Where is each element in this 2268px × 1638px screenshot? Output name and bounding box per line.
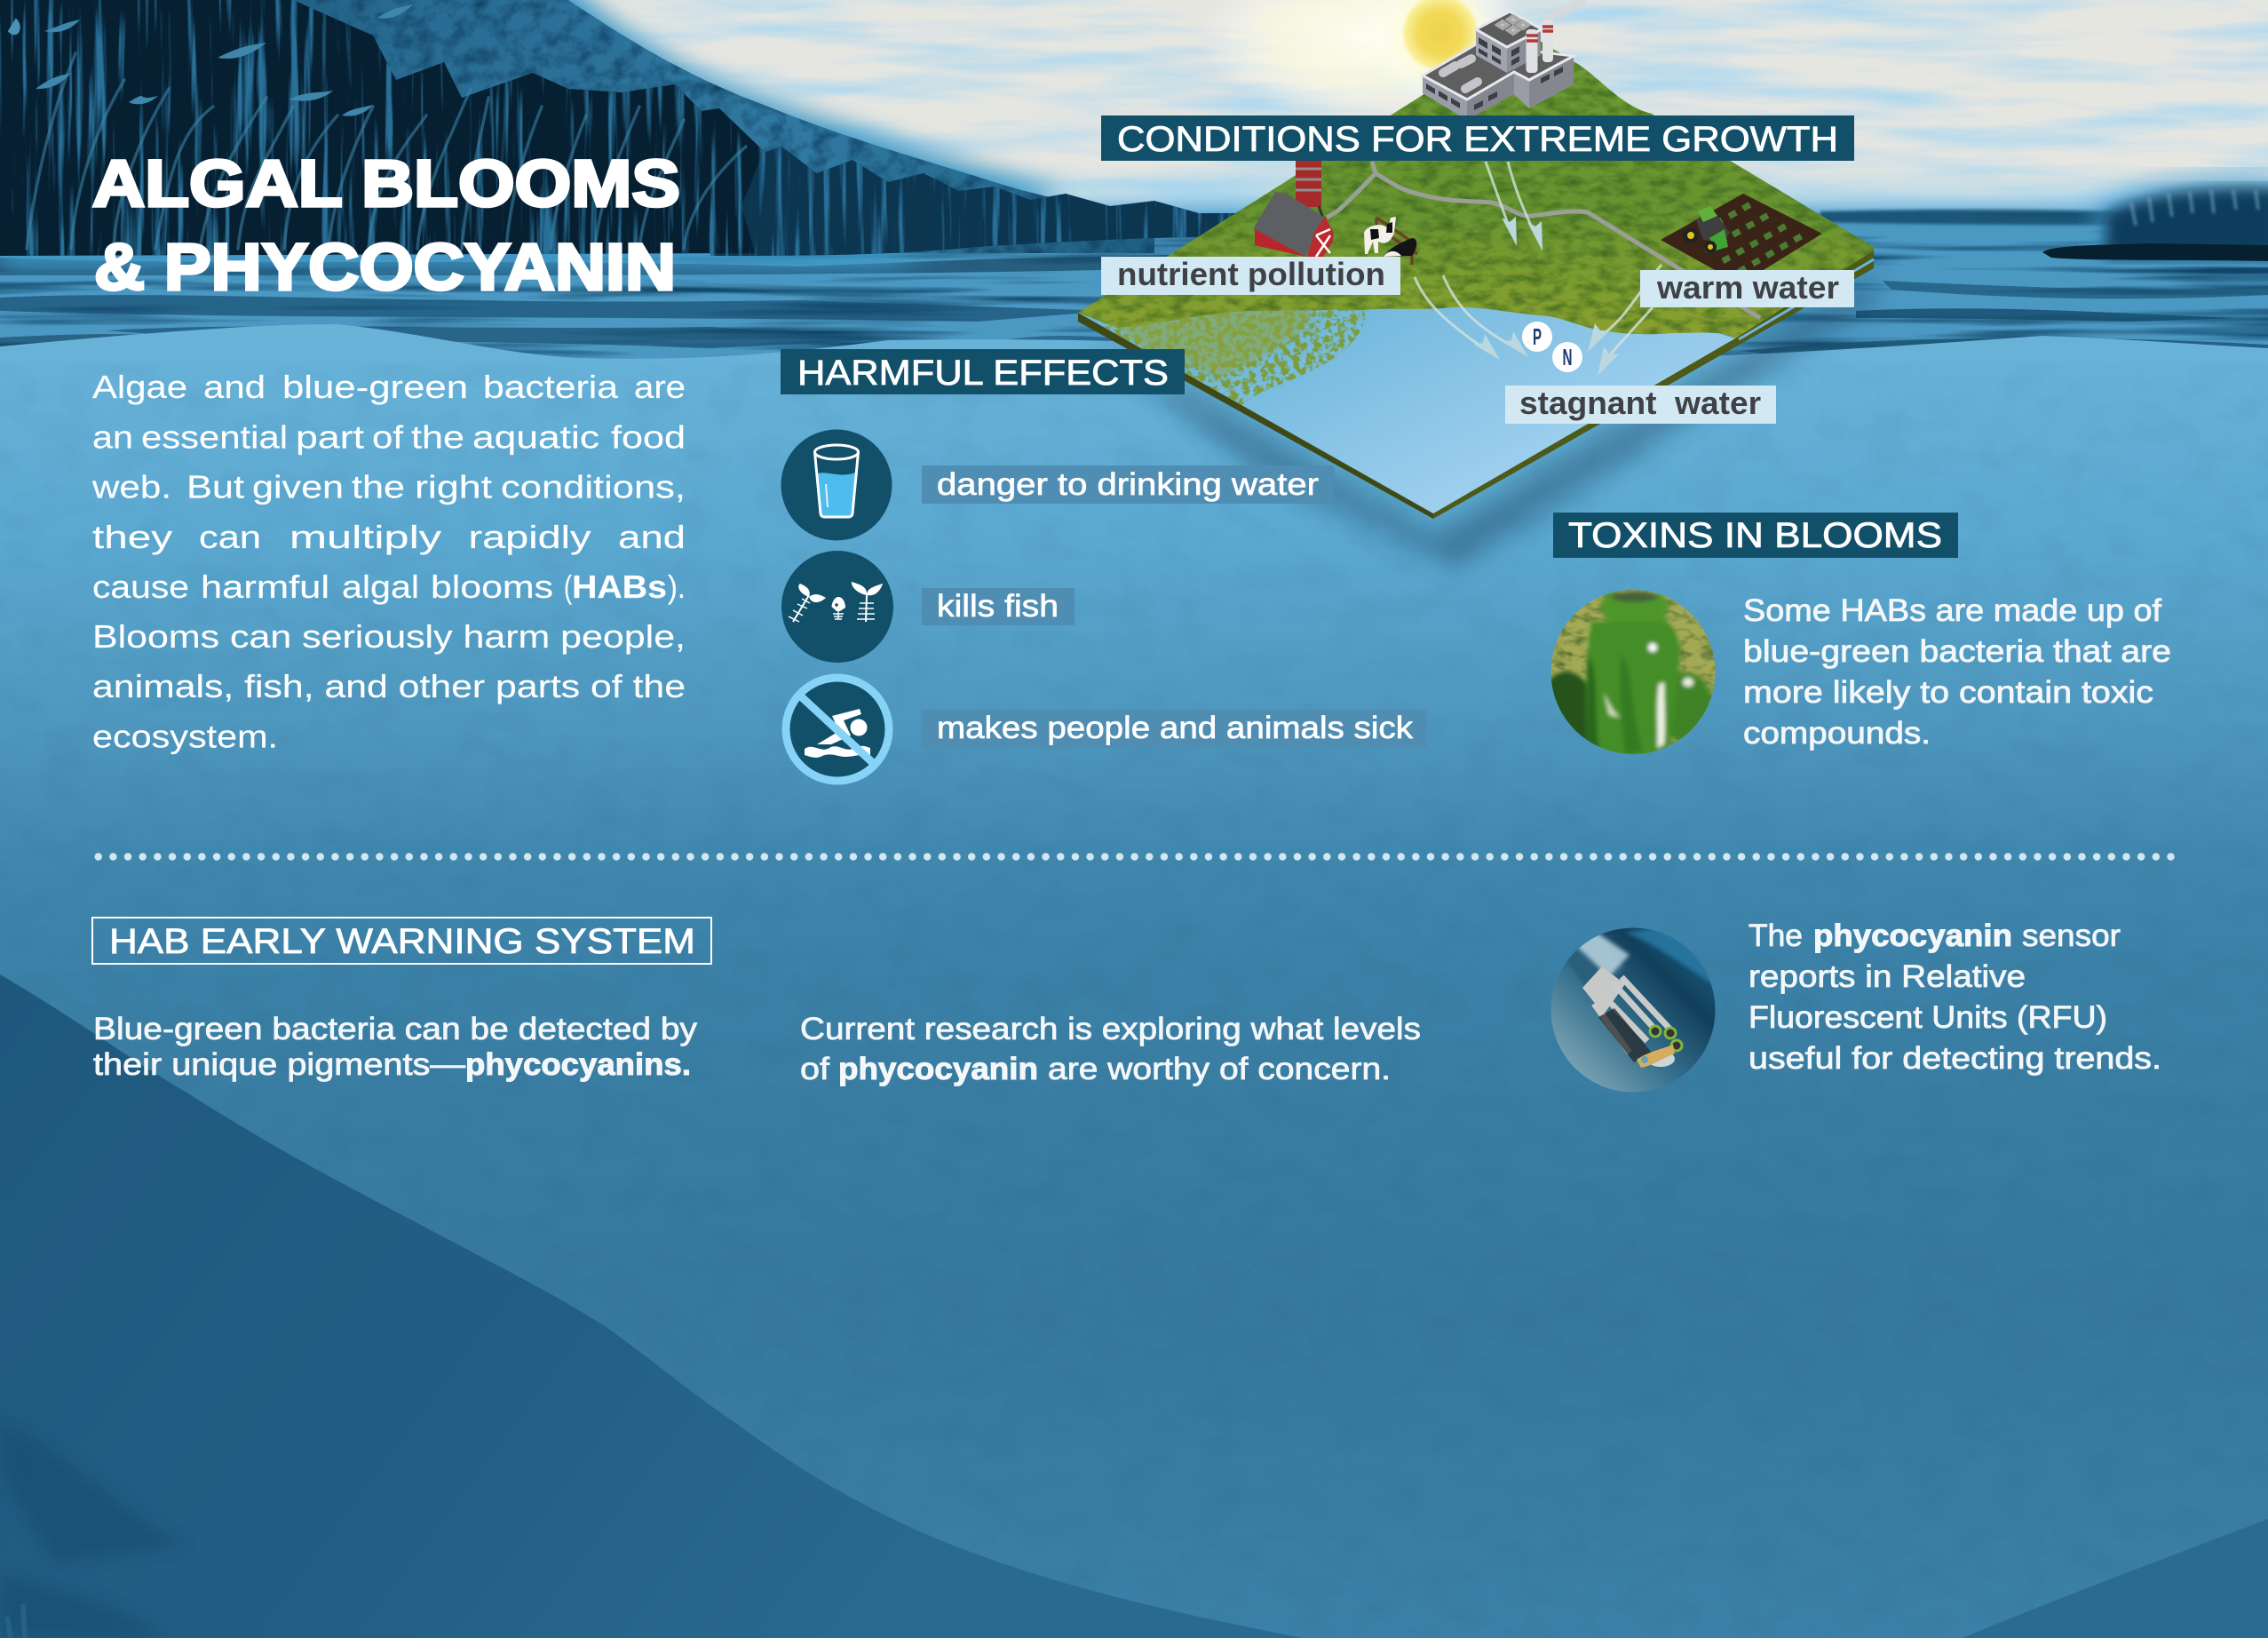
- icon: dead fish: [781, 551, 893, 663]
- toxins text: Some HABs are made up of: [1743, 593, 2161, 628]
- arrow heads: [1474, 217, 1619, 376]
- intro paragraph: are: [634, 369, 686, 405]
- land with hills: [1078, 31, 1874, 338]
- heading: HAB early warning system: HAB EARLY WARNING SYSTEM: [109, 922, 695, 961]
- nutrient markers P and N: P: [1533, 323, 1542, 350]
- intro paragraph: web.: [91, 469, 171, 505]
- stagnant lake surface: [1078, 266, 1735, 513]
- intro paragraph: essential: [141, 419, 288, 455]
- intro paragraph: right: [415, 469, 492, 505]
- toxins text: more likely to contain toxic: [1743, 675, 2153, 710]
- sun: [1199, 0, 1536, 120]
- block sides: [1078, 249, 1874, 519]
- label: nutrient pollution: nutrient pollution: [1117, 256, 1385, 292]
- intro paragraph: the: [411, 419, 464, 455]
- intro paragraph: given: [252, 469, 344, 505]
- text: phycocyanin sensor: sensor: [2022, 918, 2121, 953]
- panel: toxins in blooms: [1538, 513, 2171, 760]
- runoff arrows: [1415, 162, 1661, 357]
- intro paragraph: an: [92, 419, 133, 455]
- intro paragraph: multiply: [289, 519, 441, 555]
- text: phycocyanin sensor: useful for detecting trends.: [1749, 1041, 2161, 1076]
- intro paragraph: animals, fish, and other parts of the: [92, 668, 686, 704]
- toxins text: [1743, 593, 2171, 751]
- intro paragraph: ).: [668, 569, 686, 605]
- text: current research: of: [800, 1052, 829, 1086]
- text: blue-green bacteria detection: phycocyanins.: [465, 1047, 691, 1082]
- heading: toxins in blooms: TOXINS IN BLOOMS: [1568, 516, 1942, 555]
- intro paragraph: But: [186, 469, 244, 505]
- top left hill glow: [0, 0, 1066, 266]
- icon: glass of water: [781, 430, 892, 540]
- nutrient markers P and N: N: [1563, 344, 1572, 370]
- distant trees, right: [2042, 175, 2268, 261]
- text: phycocyanin sensor: [1749, 918, 2161, 1076]
- intro paragraph: food: [611, 419, 686, 455]
- intro paragraph: rapidly: [469, 519, 591, 555]
- intro paragraph: and: [203, 369, 266, 405]
- intro paragraph: and: [618, 519, 686, 555]
- nutrient markers P and N: [1522, 322, 1582, 372]
- text: phycocyanin sensor: reports in Relative: [1749, 959, 2026, 994]
- cows and fence: [1364, 217, 1417, 265]
- intro paragraph: can: [199, 519, 261, 555]
- text: current research: [800, 1012, 1421, 1086]
- text: current research: are worthy of concern.: [1048, 1052, 1391, 1086]
- intro paragraph: the: [352, 469, 405, 505]
- title: [92, 147, 680, 304]
- intro paragraph: algal: [342, 569, 419, 605]
- title: ALGAL BLOOMS: [92, 147, 680, 220]
- top left hill: [0, 0, 1154, 253]
- label: danger to drinking water: danger to drinking water: [937, 467, 1319, 502]
- toxins text: blue-green bacteria that are: [1743, 634, 2171, 669]
- heading: harmful effects: HARMFUL EFFECTS: [797, 354, 1169, 393]
- label: warm water: warm water: [1656, 269, 1839, 306]
- intro paragraph: bacteria: [483, 369, 619, 405]
- text: current research: Current research is exploring what levels: [800, 1012, 1421, 1046]
- intro paragraph: Algae: [92, 369, 187, 405]
- text: phycocyanin sensor: phycocyanin: [1813, 918, 2012, 953]
- conditions diagram: isometric watershed block: [1078, 0, 1874, 569]
- intro paragraph: conditions,: [501, 469, 686, 505]
- title: & PHYCOCYANIN: [94, 230, 676, 304]
- intro paragraph: ecosystem.: [92, 718, 278, 755]
- panel: HAB early warning system: [92, 918, 2161, 1093]
- intro paragraph: blooms: [431, 569, 553, 605]
- text: blue-green bacteria detection: Blue-green bacteria can be detected by: [93, 1012, 698, 1046]
- factory: [1423, 2, 1582, 120]
- intro paragraph: of: [372, 419, 404, 455]
- heading: conditions for extreme growth: CONDITIONS FOR EXTREME GROWTH: [1117, 120, 1838, 159]
- photo: jar of green water: [1550, 590, 1716, 754]
- icon: no swimming: [786, 678, 889, 781]
- distant tree line, centre: [710, 133, 1261, 256]
- label: kills fish: [922, 588, 1075, 625]
- intro paragraph: they: [92, 519, 172, 555]
- intro paragraph: harmful: [201, 569, 329, 605]
- label: kills fish: kills fish: [937, 589, 1059, 624]
- planted field and tractor: [1661, 194, 1822, 284]
- intro paragraph: cause: [92, 569, 189, 605]
- label: stagnant water: stagnant water: [1519, 385, 1761, 421]
- far shoreline water band: [0, 210, 2268, 373]
- reeds: [0, 0, 764, 256]
- algae patch: [1098, 309, 1368, 405]
- label: makes people and animals sick: makes people and animals sick: [937, 711, 1414, 745]
- silo and barn: [1253, 161, 1334, 257]
- lower left hill: [0, 974, 1302, 1638]
- toxins text: compounds.: [1743, 716, 1931, 751]
- text: phycocyanin sensor: The: [1749, 918, 1803, 953]
- text: blue-green bacteria detection: their unique pigments—: [93, 1047, 465, 1082]
- reed blades and leaves: [9, 4, 746, 249]
- intro paragraph: HABs: [572, 569, 667, 605]
- text: phycocyanin sensor: Fluorescent Units (RFU): [1749, 1000, 2107, 1035]
- panel: harmful effects: [781, 349, 1427, 781]
- intro paragraph: Blooms can seriously harm people,: [92, 618, 686, 655]
- text: blue-green bacteria detection: [93, 1012, 698, 1082]
- block shadow: [1078, 275, 1874, 569]
- text: current research: phycocyanin: [838, 1052, 1038, 1086]
- intro paragraph: aquatic: [472, 419, 599, 455]
- intro paragraph: (: [564, 569, 572, 605]
- intro paragraph: [91, 369, 686, 755]
- intro paragraph: part: [296, 419, 364, 455]
- intro paragraph: blue-green: [282, 369, 468, 405]
- roads: [1327, 162, 1760, 318]
- lower right shadow: [1963, 1519, 2268, 1638]
- photo: phycocyanin sensor: [1550, 927, 1716, 1093]
